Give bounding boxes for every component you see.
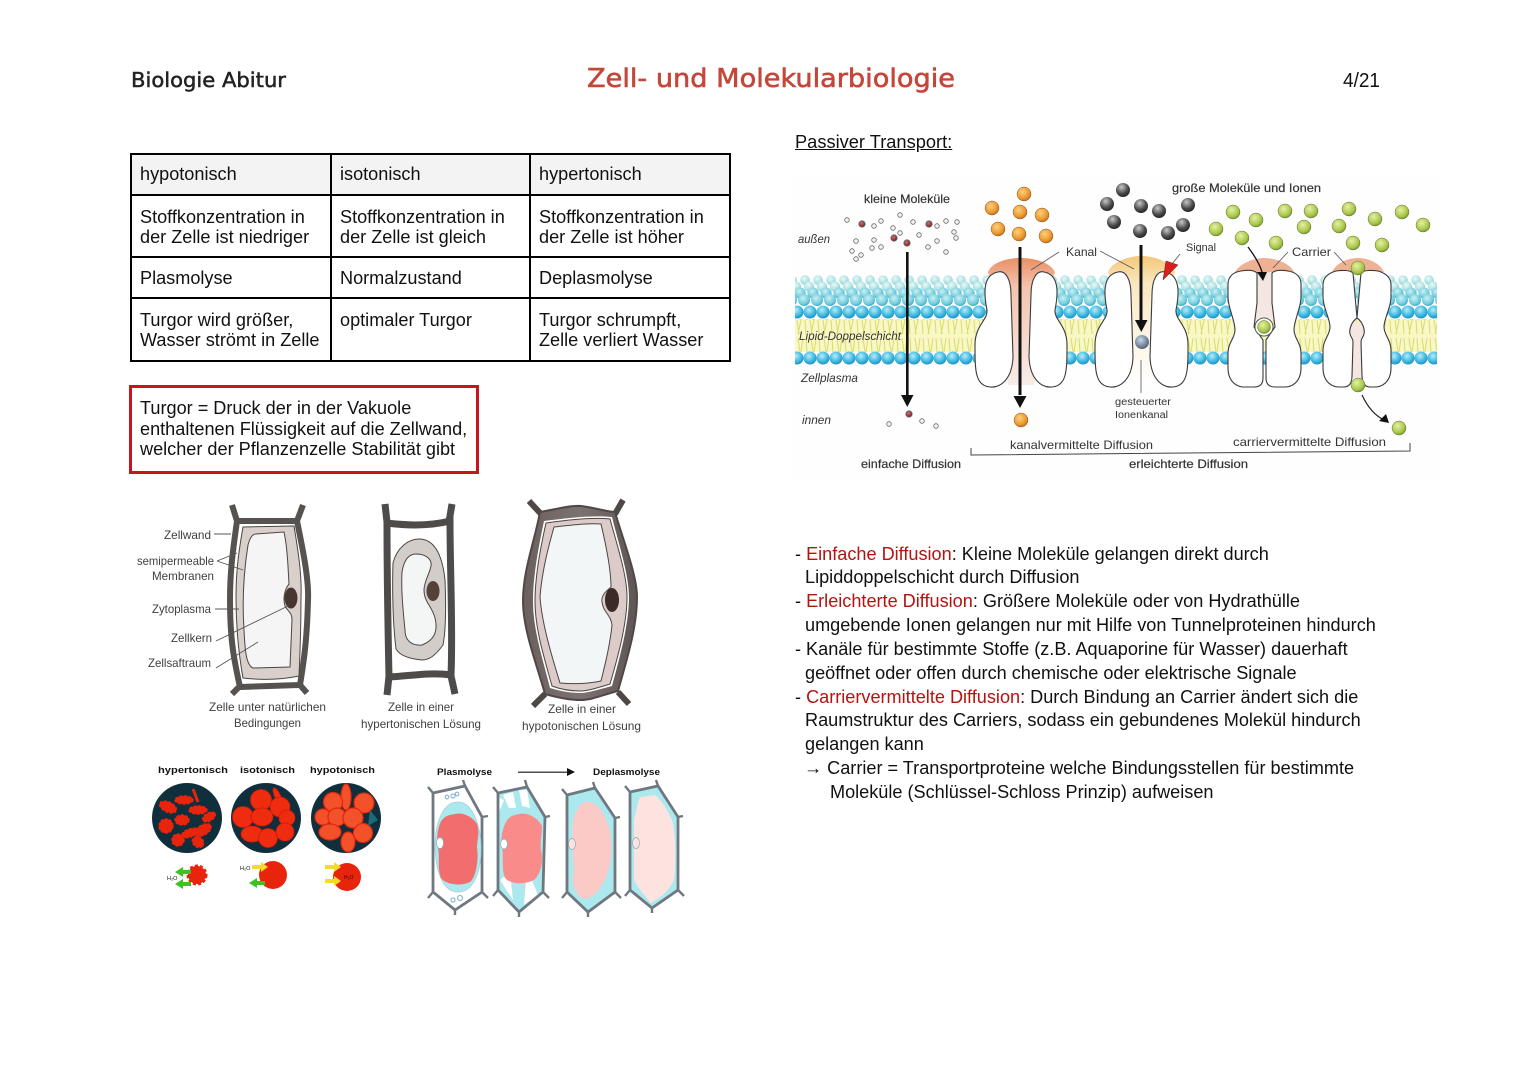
small molecules (845, 213, 959, 428)
cell labels: Zytoplasma (152, 602, 211, 616)
table: solution comparison: Turgor wird größer, (140, 310, 293, 330)
leader lines (1031, 251, 1346, 393)
diagram: red blood cells (152, 765, 381, 891)
table: solution comparison: der Zelle ist gleich (340, 226, 486, 246)
green molecules (1209, 202, 1430, 435)
table: solution comparison: der Zelle ist niedriger (140, 226, 309, 246)
cell labels: Zellkern (171, 631, 212, 645)
osmosis hypertonic (167, 866, 206, 889)
table: solution comparison: isotonisch (340, 164, 421, 184)
osmosis hypotonic (325, 862, 361, 891)
cell labels: Zelle unter natürlichen (209, 700, 326, 714)
cell labels: Zellsaftraum (148, 656, 211, 670)
table: solution comparison: Normalzustand (340, 268, 462, 288)
membrane labels: große Moleküle und Ionen (1172, 181, 1321, 195)
signal wedge (1163, 261, 1178, 280)
diagram: plant cells in different solutions (137, 500, 641, 733)
blood cell headings (158, 765, 375, 776)
plasmolysis headings and arrow: Plasmolyse (437, 767, 492, 777)
cell under natural conditions (214, 505, 308, 694)
membrane labels: Signal (1186, 242, 1216, 254)
text block: types of diffusion: - Carriervermittelte Diffusion: Durch Bindung an Carrier ändert sich die (795, 687, 1358, 707)
cell labels: Zelle in einer (548, 702, 616, 716)
heading: passive transport: Passiver Transport: (795, 131, 952, 152)
plasmolysed cell A (428, 780, 488, 915)
plasmolysis headings and arrow (437, 767, 660, 777)
text block: types of diffusion: - Einfache Diffusion: Kleine Moleküle gelangen direkt durch (795, 544, 1269, 564)
table: solution comparison (130, 153, 731, 362)
blood cell headings: isotonisch (240, 765, 295, 776)
cell labels (137, 528, 641, 733)
table: solution comparison: optimaler Turgor (340, 310, 472, 330)
diagram: plasmolysis to deplasmolysis (428, 767, 684, 917)
membrane labels: Kanal (1066, 245, 1097, 259)
closed carrier protein (1323, 258, 1391, 387)
text block: types of diffusion: geöffnet oder offen durch chemische oder elektrische Signale (805, 663, 1297, 683)
osmosis hypertonic: H₂O (167, 876, 178, 882)
callout: Turgor definition: welcher der Pflanzenzelle Stabilität gibt (140, 439, 455, 459)
title: Zell- und Molekularbiologie (587, 64, 955, 94)
membrane labels: Zellplasma (800, 371, 858, 385)
membrane labels: erleichterte Diffusion (1129, 457, 1248, 471)
osmosis hypotonic: H₂O (344, 875, 354, 881)
open carrier protein (1228, 258, 1301, 387)
text block: types of diffusion: - Erleichterte Diffusion: Größere Moleküle oder von Hydrathülle (795, 591, 1300, 611)
page number: 4/21 (1343, 70, 1380, 92)
membrane labels: Carrier (1292, 245, 1331, 259)
bracket (971, 443, 1410, 455)
cell labels: Bedingungen (234, 716, 301, 730)
callout: Turgor definition (129, 385, 479, 474)
osmosis isotonic (240, 861, 287, 889)
table: solution comparison: Stoffkonzentration in (340, 206, 505, 226)
hypertonic blood cells (152, 783, 222, 853)
text block: types of diffusion (795, 544, 1376, 802)
membrane labels: kanalvermittelte Diffusion (1010, 438, 1153, 452)
cell in hypertonic solution (385, 504, 455, 695)
membrane labels (798, 181, 1386, 471)
plasmolysis headings and arrow: Deplasmolyse (593, 767, 660, 777)
channel protein (975, 258, 1067, 387)
table: solution comparison: Plasmolyse (140, 268, 233, 288)
cell labels: Zelle in einer (388, 700, 454, 714)
text block: types of diffusion: Lipiddoppelschicht durch Diffusion (805, 567, 1080, 587)
membrane labels: außen (798, 232, 830, 246)
cell labels: hypotonischen Lösung (522, 719, 641, 733)
text block: types of diffusion: gelangen kann (805, 734, 924, 754)
hypotonic blood cells (311, 783, 381, 853)
arrows (901, 245, 1389, 423)
membrane labels: carriervermittelte Diffusion (1233, 435, 1386, 449)
orange molecules (985, 187, 1053, 427)
table: solution comparison: hypertonisch (539, 164, 642, 184)
cell labels: Zellwand (164, 528, 211, 542)
osmosis isotonic: H₂O (240, 866, 251, 872)
dark ions (1100, 183, 1195, 349)
membrane labels: gesteuerter (1115, 397, 1172, 408)
table: solution comparison: Turgor schrumpft, (539, 310, 681, 330)
membrane labels: innen (802, 413, 831, 427)
callout: Turgor definition: enthaltenen Flüssigkeit auf die Zellwand, (140, 419, 467, 439)
header: Biologie Abitur: Biologie Abitur (131, 68, 287, 92)
table: solution comparison: Deplasmolyse (539, 268, 653, 288)
text block: types of diffusion: → Carrier = Transportproteine welche Bindungsstellen für bestimmte (804, 758, 1354, 778)
diagram: passive transport through the membrane (793, 175, 1438, 480)
table: solution comparison: Wasser strömt in Zelle (140, 330, 319, 350)
callout: Turgor definition: Turgor = Druck der in der Vakuole (140, 398, 411, 418)
isotonic blood cells (231, 783, 301, 853)
cell labels: hypertonischen Lösung (361, 717, 481, 731)
cell in hypotonic solution (523, 500, 637, 706)
text block: types of diffusion: - Kanäle für bestimmte Stoffe (z.B. Aquaporine für Wasser) dauerhaft (795, 639, 1348, 659)
table: solution comparison: der Zelle ist höher (539, 226, 684, 246)
text block: types of diffusion: umgebende Ionen gelangen nur mit Hilfe von Tunnelproteinen hindurch (805, 615, 1376, 635)
membrane labels: einfache Diffusion (861, 457, 961, 471)
membrane labels: Ionenkanal (1115, 410, 1168, 421)
recovered cell D (625, 780, 684, 913)
membrane labels: kleine Moleküle (864, 192, 950, 206)
lipid bilayer (795, 274, 1437, 365)
text block: types of diffusion: Raumstruktur des Carriers, sodass ein gebundenes Molekül hindurch (805, 710, 1361, 730)
recovering cell C (562, 782, 621, 917)
cell labels: semipermeable (137, 554, 214, 568)
blood cell headings: hypertonisch (158, 765, 228, 776)
table: solution comparison: Zelle verliert Wasser (539, 330, 703, 350)
membrane labels: Lipid-Doppelschicht (799, 329, 902, 343)
cell labels: Membranen (152, 569, 214, 583)
table: solution comparison: hypotonisch (140, 164, 237, 184)
table: solution comparison: Stoffkonzentration in (539, 206, 704, 226)
text block: types of diffusion: Moleküle (Schlüssel-Schloss Prinzip) aufweisen (830, 782, 1213, 802)
blood cell headings: hypotonisch (310, 765, 375, 776)
plasmolysed cell B (493, 780, 550, 917)
table: solution comparison: Stoffkonzentration in (140, 206, 305, 226)
gated ion channel (1095, 256, 1188, 387)
